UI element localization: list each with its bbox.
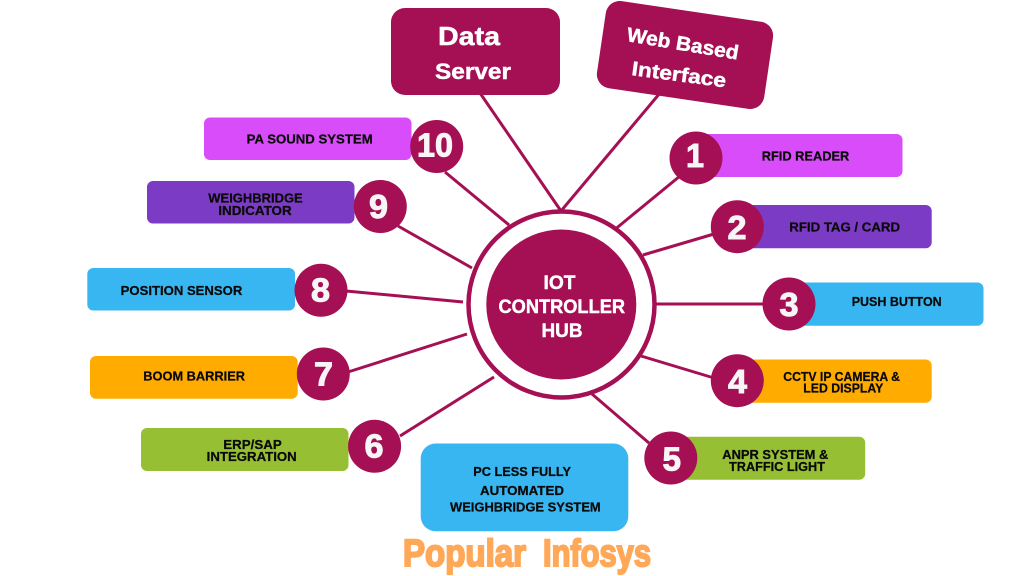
brand name: Popular xyxy=(403,533,526,575)
item 6: ERP/SAP integration: 6 xyxy=(364,428,384,464)
item 10: PA sound system: 10 xyxy=(417,126,453,164)
item 5: ANPR system and traffic light: TRAFFIC LIGHT xyxy=(729,459,825,474)
item 7: boom barrier: BOOM BARRIER xyxy=(143,369,246,384)
item 8: position sensor xyxy=(87,264,348,317)
item 6: ERP/SAP integration: INTEGRATION xyxy=(207,449,297,464)
item 3: push button xyxy=(762,278,984,330)
hub: IOT controller: IOT xyxy=(544,272,576,294)
item 5: ANPR system and traffic light: ANPR SYSTEM & xyxy=(722,447,828,462)
item 3: push button: 3 xyxy=(780,286,798,323)
hub: IOT controller: HUB xyxy=(542,320,582,342)
hub: IOT controller xyxy=(468,212,654,398)
panel: system description: PC LESS FULLY xyxy=(473,464,571,479)
item 8: position sensor: POSITION SENSOR xyxy=(121,283,243,298)
item 2: RFID tag / card xyxy=(711,200,932,253)
item 9: weighbridge indicator: 9 xyxy=(369,188,388,225)
panel: web based interface: Interface xyxy=(630,58,727,92)
panel: web based interface: Web Based xyxy=(625,24,740,65)
panel: data server: Data xyxy=(438,21,501,51)
item 9: weighbridge indicator: WEIGHBRIDGE xyxy=(208,191,303,206)
item 5: ANPR system and traffic light xyxy=(644,432,865,484)
item 4: CCTV IP camera and LED display: 4 xyxy=(728,363,748,400)
item 9: weighbridge indicator: INDICATOR xyxy=(218,203,292,218)
hub: IOT controller: CONTROLLER xyxy=(498,296,625,318)
item 10: PA sound system: PA SOUND SYSTEM xyxy=(247,131,373,146)
item 4: CCTV IP camera and LED display: LED DISPLAY xyxy=(803,381,884,396)
panel: system description: AUTOMATED xyxy=(480,483,564,498)
item 1: RFID reader: RFID READER xyxy=(762,149,850,164)
item 10: PA sound system xyxy=(204,118,463,173)
item 7: boom barrier xyxy=(90,348,350,400)
item 4: CCTV IP camera and LED display xyxy=(711,354,932,407)
item 9: weighbridge indicator xyxy=(147,180,407,233)
panel: system description: WEIGHBRIDGE SYSTEM xyxy=(450,500,601,515)
item 3: push button: PUSH BUTTON xyxy=(852,294,942,309)
panel: system description xyxy=(421,444,628,531)
item 6: ERP/SAP integration xyxy=(141,420,401,473)
panel: data server: Server xyxy=(435,59,511,84)
item 1: RFID reader xyxy=(670,132,902,184)
item 6: ERP/SAP integration: ERP/SAP xyxy=(223,437,282,452)
brand name xyxy=(403,533,651,575)
panel: web based interface xyxy=(595,0,775,111)
item 2: RFID tag / card: RFID TAG / CARD xyxy=(789,220,900,235)
brand name: Infosys xyxy=(543,533,651,575)
item 7: boom barrier: 7 xyxy=(314,356,333,392)
item 8: position sensor: 8 xyxy=(311,272,330,308)
item 1: RFID reader: 1 xyxy=(686,137,704,174)
item 4: CCTV IP camera and LED display: CCTV IP CAMERA & xyxy=(783,369,900,384)
item 5: ANPR system and traffic light: 5 xyxy=(662,440,681,478)
item 2: RFID tag / card: 2 xyxy=(728,209,746,246)
panel: data server xyxy=(391,8,560,95)
